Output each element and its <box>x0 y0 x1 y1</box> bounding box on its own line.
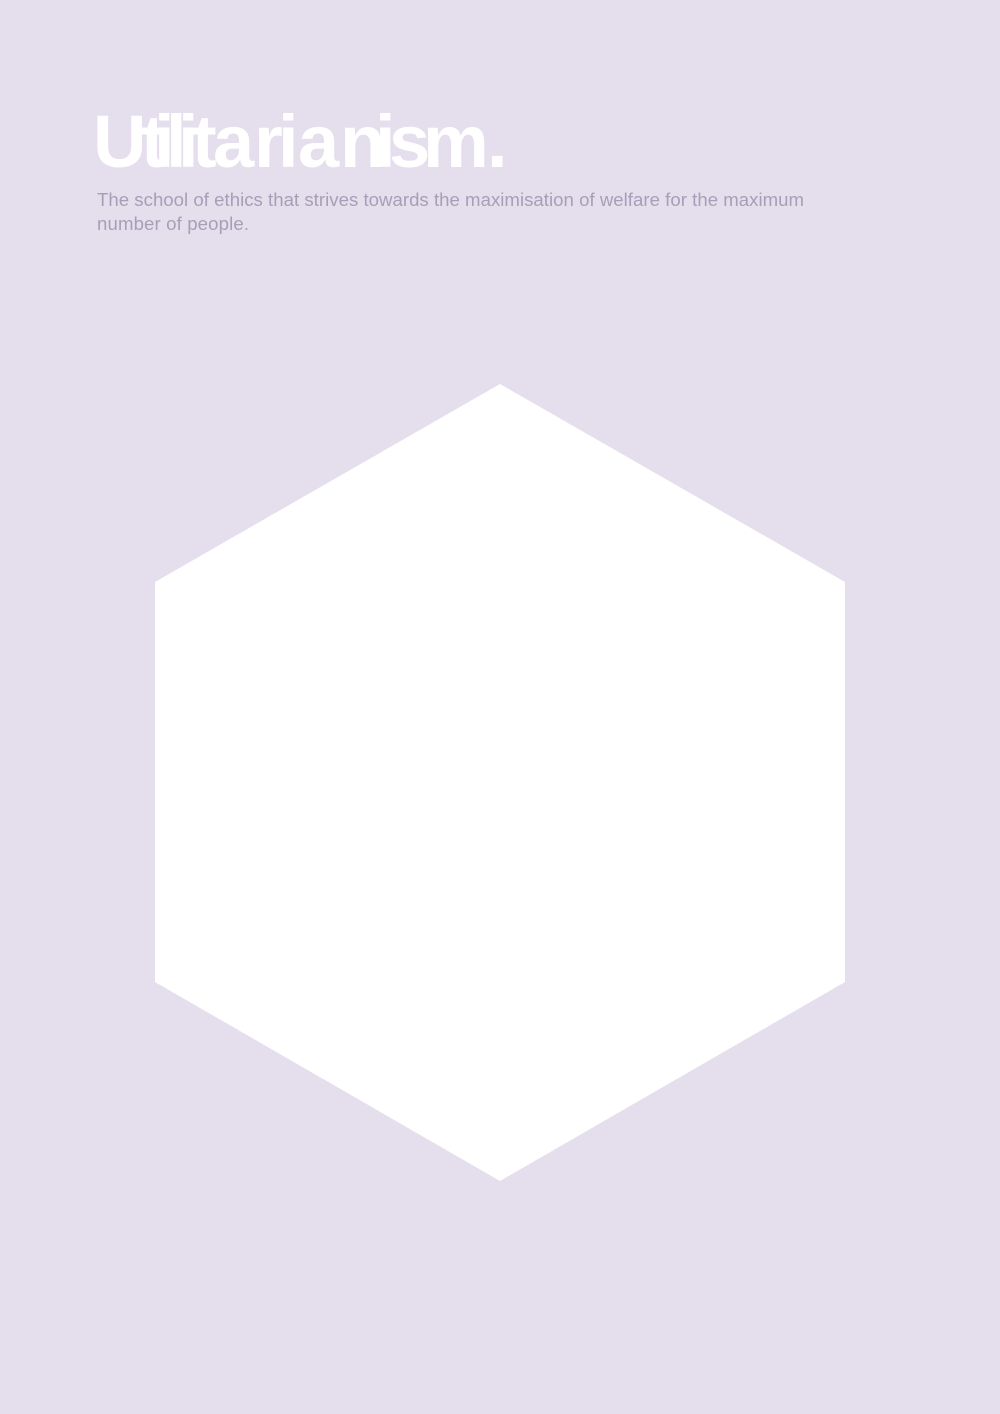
description text <box>97 189 804 234</box>
description text: number of people. <box>97 213 249 234</box>
description text: The school of ethics that strives towards the maximisation of welfare for the maximum <box>97 189 804 210</box>
title: Utilitarianism. <box>93 100 508 183</box>
icon: white hexagon <box>155 384 845 1181</box>
